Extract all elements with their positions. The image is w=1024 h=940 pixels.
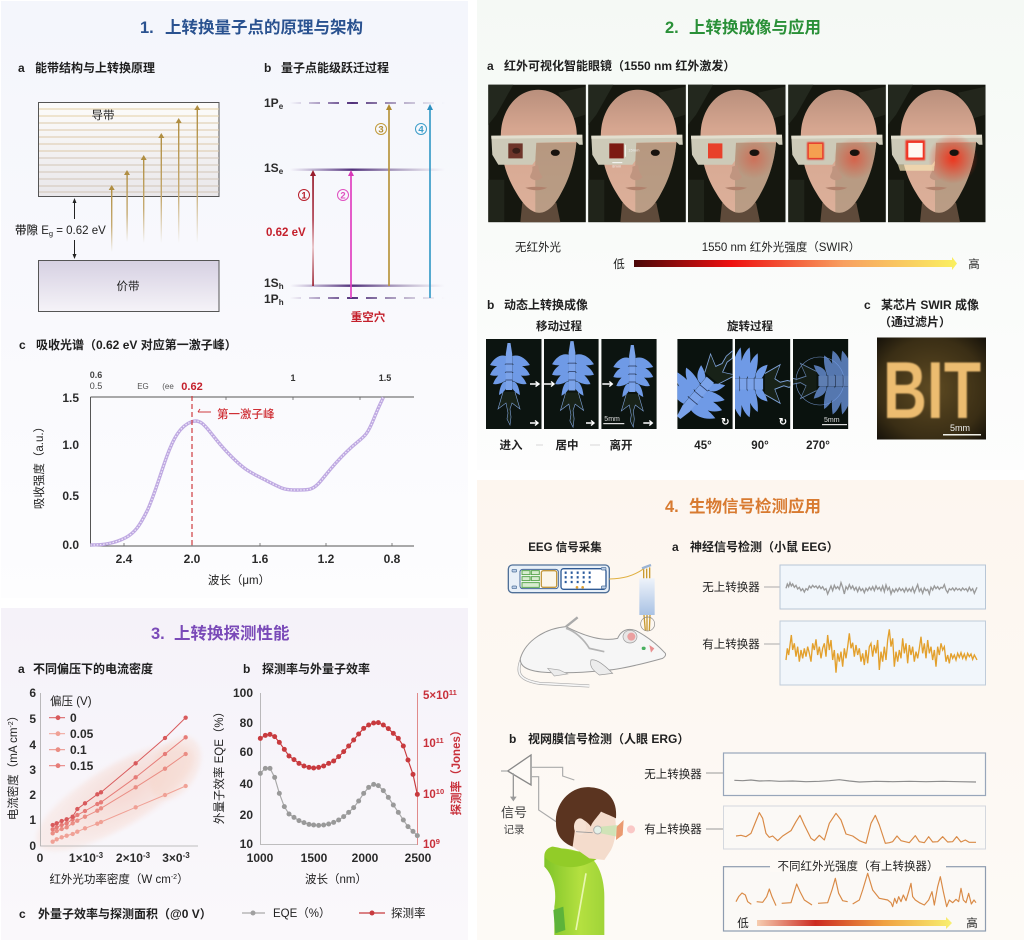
subheading b: 探测率与外量子效率	[262, 661, 370, 676]
moving image 3: 5mm	[604, 416, 620, 423]
upconversion arrows	[109, 105, 200, 252]
y axis labels: 1.5	[62, 391, 79, 405]
series	[260, 723, 417, 836]
subheading c	[864, 297, 979, 329]
y axis labels: 4	[29, 738, 36, 752]
caption labels rotating	[694, 440, 830, 452]
right axis labels	[423, 688, 463, 851]
signal record label: 信号	[501, 805, 527, 820]
axes	[90, 397, 414, 546]
top axis labels: EG	[137, 382, 149, 391]
y axis labels: 2	[29, 788, 36, 802]
legend EQE: EQE（%）	[273, 907, 331, 920]
caption labels rotating: 270°	[806, 440, 830, 452]
subheading b: 视网膜信号检测（人眼 ERG）	[528, 731, 689, 746]
energy level diagram	[264, 96, 445, 324]
y axis labels: 1	[29, 813, 36, 827]
arrow 1: 1	[301, 190, 307, 202]
subheading c: 外量子效率与探测面积（@0 V）	[38, 906, 212, 921]
moving image 3	[601, 339, 657, 429]
axes	[40, 693, 198, 846]
amplifier diagram	[501, 755, 576, 832]
subheading b: b	[264, 61, 271, 75]
levels	[264, 96, 445, 307]
device	[508, 565, 609, 593]
right axis labels: 9	[436, 837, 440, 846]
heading: section 3: 3.	[151, 625, 165, 643]
x axis labels: 2000	[352, 851, 379, 865]
peak marker: 第一激子峰	[217, 407, 275, 421]
conduction band: 导带	[92, 109, 114, 122]
ERG intensity panel: 高	[966, 916, 978, 930]
rotating image 90: ↻	[779, 417, 787, 428]
arrow 3: 3	[378, 124, 384, 136]
arrow 2	[338, 170, 354, 298]
x axis labels: -3	[183, 851, 190, 860]
x axis labels: 1.6	[252, 552, 269, 566]
hair	[556, 787, 616, 847]
detectivity and EQE chart	[212, 686, 463, 886]
y axis labels	[32, 391, 79, 552]
right axis labels: 10	[423, 839, 436, 851]
left axis labels: 80	[240, 716, 253, 730]
legend detectivity: 探测率	[391, 906, 426, 920]
top axis labels: 0.6	[90, 370, 102, 380]
smart glasses photo 1	[488, 85, 586, 222]
caption labels rotating: 90°	[751, 440, 769, 452]
left axis labels: 外量子效率 EQE（%）	[212, 706, 226, 824]
moving image 2	[544, 339, 599, 429]
legend: 0.1	[70, 743, 87, 757]
right axis labels: 探测率（Jones）	[449, 725, 463, 815]
top axis labels: (ee	[162, 382, 174, 391]
peak marker	[192, 396, 275, 546]
label with upconverter EEG: 有上转换器	[702, 637, 760, 651]
heading: section 4: 生物信号检测应用	[689, 496, 821, 516]
current density chart	[6, 686, 220, 886]
signal record label	[501, 805, 527, 836]
rotating image 45	[677, 339, 733, 429]
label no upconverter EEG: 无上转换器	[702, 580, 760, 594]
signal record label: 记录	[504, 824, 524, 836]
right axis labels: 5×10	[423, 690, 449, 702]
levels: h	[279, 282, 284, 291]
ear	[574, 818, 586, 835]
levels: 1P	[264, 96, 279, 110]
smart glasses photo 2: 8mm	[612, 164, 622, 169]
EEG device and rat illustration	[508, 565, 666, 686]
label with upconverter ERG: 有上转换器	[644, 822, 702, 836]
boy illustration	[544, 787, 635, 935]
subheading a: a	[487, 59, 494, 73]
subheading a: a	[18, 662, 25, 676]
legend EQE	[242, 907, 331, 920]
valence band	[38, 260, 219, 312]
left axis labels: 10	[240, 837, 253, 851]
smart glasses photo 2	[588, 85, 686, 222]
caption labels moving: 离开	[610, 438, 632, 452]
subheading b: b	[243, 662, 250, 676]
absorption chart	[32, 370, 414, 587]
y axis labels: 3	[29, 763, 36, 777]
x axis labels: 0	[37, 851, 44, 865]
shaded region	[40, 717, 220, 863]
subheading a: 神经信号检测（小鼠 EEG）	[690, 539, 839, 554]
valence band: 价带	[116, 280, 140, 293]
ERG intensity panel: 不同红外光强度（有上转换器）	[778, 859, 938, 873]
levels: 1S	[264, 161, 279, 175]
levels: 1S	[264, 276, 279, 290]
legend: 0	[70, 711, 77, 725]
x axis labels	[247, 851, 432, 886]
subheading moving: 移动过程	[536, 319, 582, 333]
caption labels moving	[500, 438, 632, 452]
intensity gradient arrow	[613, 257, 980, 271]
lens and prism	[594, 826, 602, 834]
gradient arrow	[757, 917, 952, 929]
y axis labels: 0.0	[62, 538, 79, 552]
left axis labels: 40	[240, 777, 253, 791]
x axis labels: 1×10	[69, 851, 96, 865]
x axis labels: 3×0	[162, 851, 183, 865]
left axis labels: 60	[240, 745, 253, 759]
smart glasses photo 5	[888, 85, 986, 222]
BIT image	[877, 338, 986, 440]
subheading b: 动态上转换成像	[504, 297, 588, 312]
axes	[260, 693, 418, 844]
label no upconverter ERG: 无上转换器	[644, 767, 702, 781]
traces	[736, 873, 976, 907]
x axis labels: 2.0	[184, 552, 201, 566]
top axis labels: 1	[290, 373, 296, 383]
y axis labels: 0.5	[62, 489, 79, 503]
rotating image 90	[735, 339, 790, 429]
top axis labels: 0.62	[181, 381, 203, 393]
heading: section 4: 4.	[665, 498, 679, 516]
subheading a: a	[672, 540, 679, 554]
x axis labels	[37, 851, 190, 886]
top axis labels: 1.5	[379, 373, 391, 383]
BIT image: 5mm	[950, 423, 970, 433]
legend: 0.15	[70, 759, 94, 773]
legend: 偏压 (V)	[50, 694, 92, 708]
legend detectivity	[359, 906, 426, 920]
panel: 4 biosignal applications	[477, 480, 1024, 940]
subheading c: c	[19, 338, 26, 352]
intensity labels	[515, 240, 860, 254]
arrow 2: 2	[340, 190, 346, 202]
left axis labels: 20	[240, 808, 253, 822]
right axis labels: 10	[423, 789, 436, 801]
panel: 3 detection performance	[1, 608, 468, 940]
x axis labels: 红外光功率密度（W cm	[49, 874, 171, 886]
intensity labels: 1550 nm 红外光强度（SWIR）	[702, 240, 860, 254]
right axis labels: 11	[436, 736, 444, 745]
x axis labels: -3	[143, 851, 151, 860]
ERG trace without upconverter	[706, 753, 986, 829]
subheading c: c	[864, 298, 871, 312]
rotating image 45: ↻	[721, 417, 729, 428]
heading: section 2: 2.	[665, 19, 679, 37]
right axis labels: 11	[449, 688, 457, 697]
panel: 1 principle and architecture	[1, 1, 468, 598]
panel: 2 imaging and applications	[477, 0, 1024, 470]
rat	[519, 617, 666, 686]
legend	[49, 694, 94, 773]
intensity gradient arrow: 高	[968, 257, 980, 271]
heading: section 2: 上转换成像与应用	[689, 17, 821, 37]
x axis labels: 1000	[247, 851, 274, 865]
subheading a: 不同偏压下的电流密度	[33, 661, 153, 676]
caption labels rotating: 45°	[694, 440, 712, 452]
top axis labels	[90, 370, 391, 393]
y axis labels: 电流密度（mA cm	[8, 728, 20, 820]
band gap label	[15, 198, 106, 259]
wire and probe	[609, 565, 655, 631]
EEG trace without upconverter	[764, 565, 986, 644]
arrow 4	[416, 104, 433, 298]
left axis labels: 100	[233, 686, 253, 700]
levels: e	[279, 167, 284, 176]
ERG intensity panel: 低	[737, 917, 749, 930]
x axis labels: 1500	[301, 851, 328, 865]
arrow 4: 4	[418, 124, 424, 136]
label EEG acquisition: EEG 信号采集	[528, 540, 602, 554]
ERG trace with upconverter	[724, 806, 986, 849]
subheading c: （通过滤片）	[879, 314, 951, 329]
y axis labels: ）	[7, 710, 20, 721]
y axis labels: 6	[29, 686, 36, 700]
subheading c: 某芯片 SWIR 成像	[881, 297, 979, 312]
heading: section 1: 上转换量子点的原理与架构	[165, 18, 363, 37]
subheading a: 能带结构与上转换原理	[35, 60, 155, 75]
right axis labels: 10	[436, 787, 444, 796]
heavy hole label: 重空穴	[351, 310, 386, 324]
rotating image 270	[793, 339, 848, 429]
y axis labels	[6, 686, 36, 853]
legend: 0.05	[70, 727, 94, 741]
x axis labels: 2×10	[116, 851, 143, 865]
band gap label: = 0.62 eV	[53, 225, 106, 237]
moving image 1	[486, 339, 542, 429]
y axis labels: 0	[29, 839, 36, 853]
series	[53, 718, 186, 842]
intensity gradient arrow: 低	[613, 258, 625, 271]
y axis labels: 吸收强度（a.u.）	[32, 421, 46, 509]
right axis labels: 10	[423, 738, 436, 750]
arrow 3	[376, 104, 392, 286]
intensity labels: 无红外光	[515, 240, 561, 254]
levels: h	[279, 298, 284, 307]
left axis labels	[212, 686, 253, 851]
arrow 1	[298, 170, 316, 286]
caption labels moving: 进入	[500, 439, 523, 452]
x axis labels: 0.8	[384, 552, 401, 566]
caption labels moving: 居中	[556, 438, 578, 452]
subheading b: b	[487, 298, 494, 312]
x axis labels: 2500	[405, 851, 432, 865]
x axis labels: ）	[177, 873, 189, 886]
head	[573, 810, 616, 860]
subheading a: a	[18, 61, 25, 75]
subheading rotating: 旋转过程	[727, 319, 773, 333]
levels: e	[279, 102, 284, 111]
band diagram	[15, 102, 219, 312]
top axis labels: 0.5	[90, 381, 102, 391]
x axis labels: -2	[171, 874, 177, 881]
y axis labels: -2	[8, 721, 15, 728]
ERG intensity panel	[724, 859, 986, 931]
x axis labels: 1.2	[318, 552, 335, 566]
x axis labels: 波长（nm）	[305, 873, 367, 886]
EEG trace with upconverter	[780, 621, 986, 685]
BIT image: BIT	[883, 346, 981, 436]
levels: 1P	[264, 292, 279, 306]
y axis labels: 5	[29, 712, 36, 726]
x axis labels	[116, 552, 401, 587]
band gap label: 带隙 E	[15, 225, 49, 237]
band gap label: g	[49, 229, 53, 238]
heading: section 3: 上转换探测性能	[174, 624, 290, 643]
conduction band	[38, 102, 219, 196]
x axis labels: 波长（μm）	[208, 574, 270, 587]
hoodie	[544, 849, 604, 935]
y axis labels: 1.0	[62, 438, 79, 452]
subheading c: 吸收光谱（0.62 eV 对应第一激子峰）	[36, 337, 237, 352]
x axis labels: -3	[96, 851, 104, 860]
subheading c: c	[19, 907, 26, 921]
absorption curve	[90, 397, 383, 545]
rotating image 270: 5mm	[824, 417, 840, 424]
energy label: 0.62 eV	[266, 227, 306, 239]
subheading b: b	[509, 732, 516, 746]
smart glasses photo 2: 15mm	[628, 148, 640, 153]
smart glasses photo 3	[688, 85, 786, 222]
subheading b: 量子点能级跃迁过程	[281, 60, 389, 75]
x axis labels: 2.4	[116, 552, 133, 566]
subheading a: 红外可视化智能眼镜（1550 nm 红外激发）	[504, 58, 735, 73]
smart glasses photo 4	[788, 85, 886, 222]
heading: section 1: 1.	[140, 19, 154, 37]
